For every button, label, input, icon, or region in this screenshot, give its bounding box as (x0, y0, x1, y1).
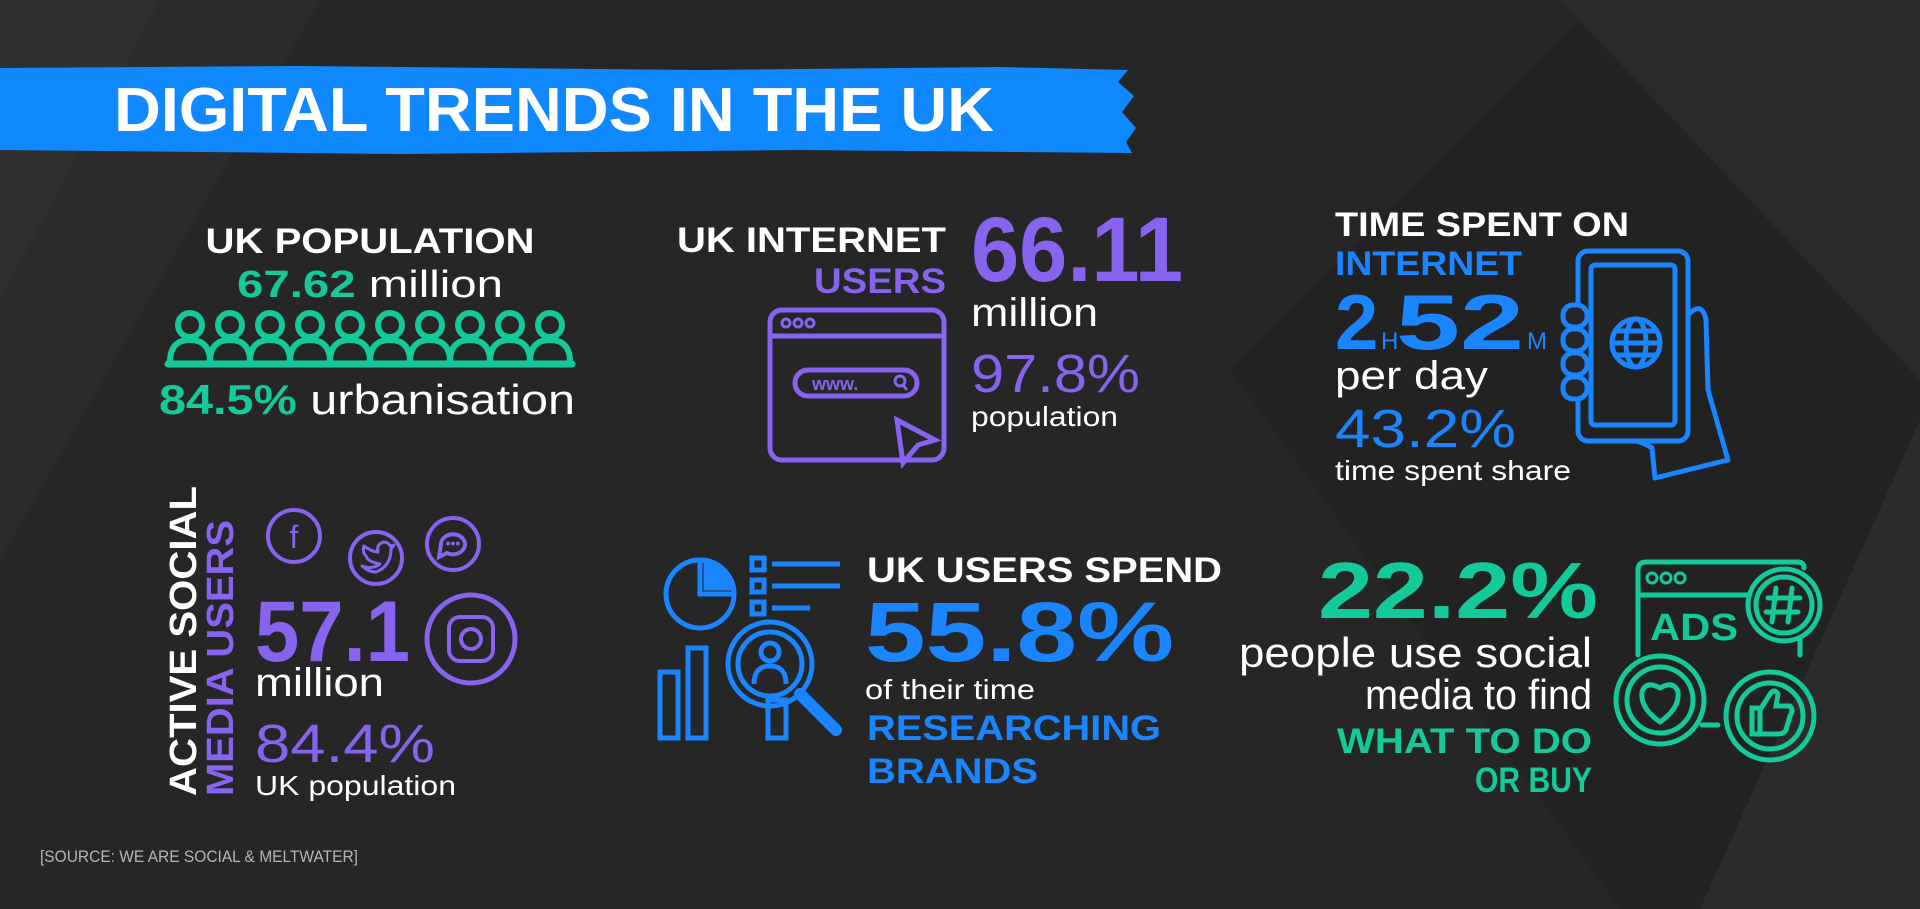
panel: time spent: 52 (1396, 278, 1524, 366)
panel: internet users: USERS (814, 262, 946, 301)
panel: researching brands: RESEARCHING (867, 709, 1161, 748)
panel: active social media users: 84.4% (255, 714, 435, 774)
panel: researching brands: 55.8% (865, 585, 1174, 679)
panel: UK population: 84.5% urbanisation (159, 376, 575, 423)
panel: researching brands: UK USERS SPEND (867, 551, 1222, 590)
panel: active social media users: ACTIVE SOCIAL (163, 486, 205, 796)
title banner (0, 66, 1136, 154)
panel: time spent: 2 (1335, 278, 1378, 366)
panel: internet users: million (971, 291, 1098, 335)
panel: active social media users: million (255, 661, 384, 705)
panel: internet users: 97.8% (971, 344, 1140, 404)
panel: time spent (1335, 206, 1728, 486)
panel: time spent: M (1527, 328, 1547, 355)
panel: internet users (677, 199, 1183, 463)
panel: active social media users: ••• (446, 535, 460, 551)
panel: time spent: time spent share (1335, 455, 1571, 486)
icon: phone in hand (1563, 251, 1728, 478)
panel: researching brands: of their time (865, 674, 1035, 705)
panel: UK population: 67.62 million (237, 264, 503, 306)
panel: social media purchase: OR BUY (1475, 761, 1592, 800)
panel: active social media users: UK population (255, 770, 456, 801)
panel: internet users: 66.11 (971, 199, 1183, 301)
panel: social media purchase: 22.2% (1318, 546, 1598, 635)
panel: researching brands: BRANDS (867, 752, 1038, 791)
panel: time spent: 43.2% (1335, 399, 1516, 459)
panel: internet users: www. (811, 374, 858, 394)
panel: social media purchase: media to find (1365, 671, 1592, 718)
panel: active social media users: f (290, 519, 299, 555)
panel: social media purchase: ADS (1650, 607, 1738, 649)
panel: time spent: H (1381, 328, 1398, 355)
panel: active social media users: MEDIA USERS (200, 520, 242, 796)
panel: social media purchase: WHAT TO DO (1337, 722, 1592, 761)
panel: time spent: TIME SPENT ON (1335, 206, 1629, 244)
panel: internet users: UK INTERNET (677, 221, 946, 260)
panel: UK population: UK POPULATION (206, 222, 534, 261)
icon: research (660, 558, 840, 738)
panel: social media purchase: people use social (1239, 629, 1592, 676)
panel: researching brands (660, 551, 1222, 791)
panel: time spent: INTERNET (1335, 245, 1522, 283)
icon: browser (770, 310, 944, 463)
icon: ads (1616, 562, 1820, 760)
panel: UK population (159, 222, 575, 423)
panel: active social media users (163, 486, 515, 801)
source note: [SOURCE: WE ARE SOCIAL & MELTWATER] (40, 847, 358, 866)
panel: active social media users: 57.1 (255, 584, 410, 680)
icons: social (268, 510, 515, 683)
title banner: DIGITAL TRENDS IN THE UK (114, 76, 994, 145)
panel: time spent: per day (1335, 354, 1488, 398)
panel: social media purchase (1239, 546, 1820, 800)
icon: people (168, 313, 572, 364)
panel: internet users: population (971, 401, 1118, 432)
